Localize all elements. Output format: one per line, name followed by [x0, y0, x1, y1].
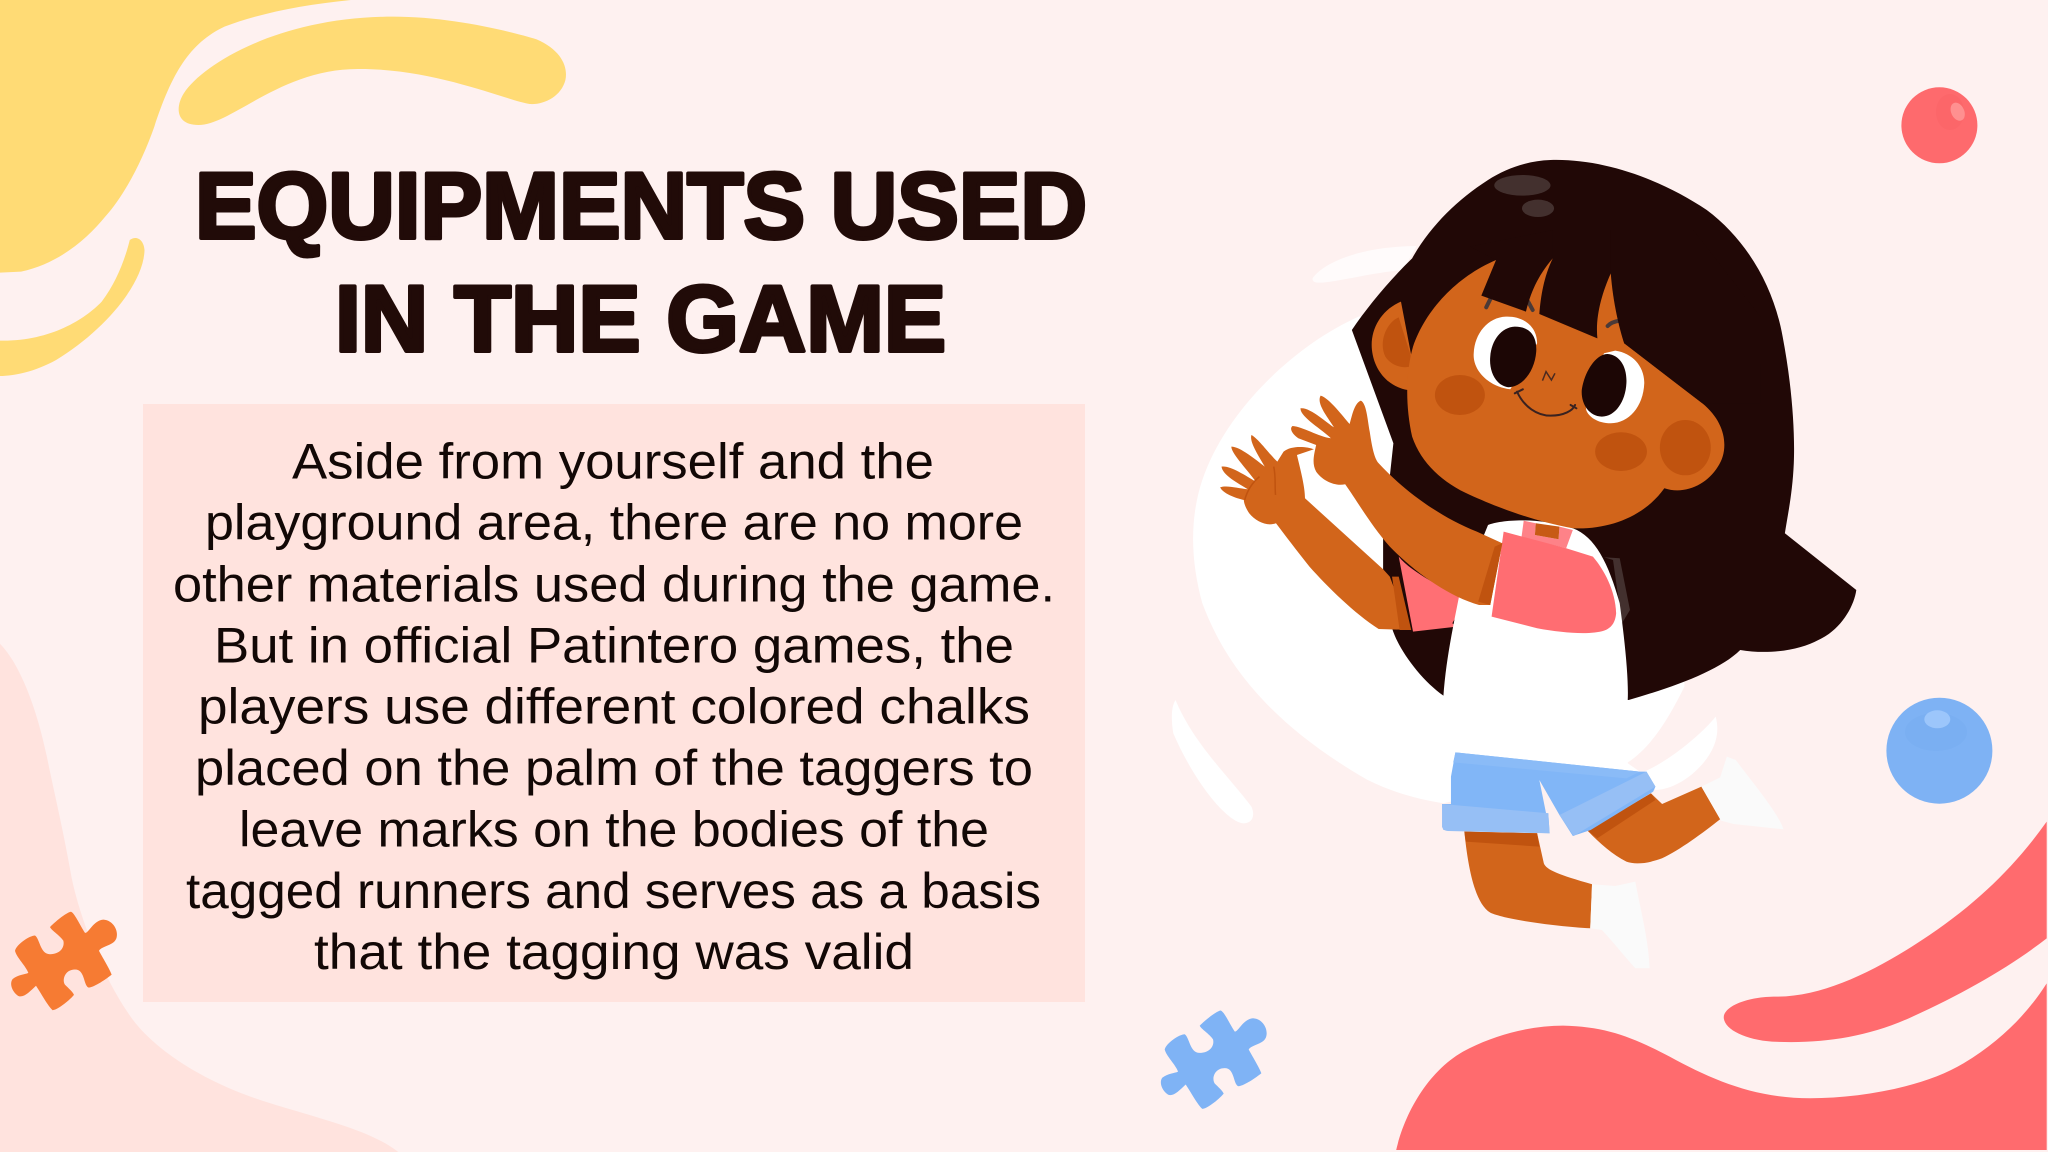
shorts	[1442, 752, 1655, 836]
icon: orange puzzle piece	[11, 912, 117, 1010]
hand fold lines	[1245, 467, 1276, 500]
left shoe	[1590, 882, 1650, 968]
cheeks	[1435, 375, 1711, 475]
body text: placed on the palm of the taggers to	[195, 740, 1033, 796]
decoration: yellow blobs top left	[0, 0, 566, 376]
shorts body	[1442, 752, 1655, 836]
panel: description	[143, 404, 1085, 1002]
right eye	[1582, 351, 1644, 423]
eyebrows	[1486, 298, 1620, 326]
title: EQUIPMENTS USED	[195, 153, 1087, 258]
right leg shadow	[1588, 793, 1655, 838]
decoration: red waves bottom right	[1396, 822, 2047, 1150]
right sleeve	[1492, 532, 1616, 633]
shirt	[1443, 520, 1640, 772]
left leg	[1464, 832, 1592, 928]
hair	[1352, 160, 1856, 700]
collar	[1521, 521, 1573, 548]
right shoe	[1701, 757, 1784, 829]
illustration: girl jumping	[1220, 160, 1856, 968]
waistband	[1453, 752, 1640, 778]
smile	[1515, 389, 1576, 416]
bangs	[1470, 230, 1760, 403]
lower arm shadow	[1392, 577, 1411, 630]
upper arm and hand	[1291, 396, 1502, 605]
lower arm and hand	[1220, 435, 1410, 630]
ear	[1372, 302, 1412, 390]
left eye	[1474, 317, 1537, 389]
decoration: white blob behind girl	[1193, 246, 1684, 803]
decoration: white swoosh top	[1313, 246, 1417, 283]
decoration: white swooshes	[1172, 700, 1717, 823]
face	[1407, 258, 1724, 528]
body text: leave marks on the bodies of the	[239, 802, 989, 858]
upper arm shadow	[1478, 543, 1502, 605]
icon: blue ball	[1886, 698, 1992, 804]
legs and shoes	[1464, 757, 1784, 968]
left sleeve	[1399, 557, 1466, 632]
nose	[1542, 372, 1555, 381]
title	[195, 153, 1087, 371]
right leg	[1588, 787, 1720, 863]
body text: that the tagging was valid	[314, 924, 914, 980]
neck	[1535, 523, 1559, 539]
upper body and head	[1220, 160, 1856, 772]
body text: players use different colored chalks	[198, 678, 1030, 734]
body text: tagged runners and serves as a basis	[186, 863, 1041, 919]
body text: other materials used during the game.	[173, 556, 1055, 612]
body text: But in official Patintero games, the	[214, 618, 1014, 674]
body text	[173, 434, 1055, 980]
hair highlights	[1494, 175, 1745, 623]
icon: blue puzzle piece	[1161, 1010, 1267, 1109]
left cuff	[1442, 804, 1550, 833]
title: IN THE GAME	[335, 266, 946, 371]
body text: Aside from yourself and the	[292, 434, 934, 490]
icon: red ball	[1901, 87, 1977, 163]
decoration: pink blob bottom left	[0, 644, 398, 1152]
left leg shadow	[1464, 832, 1539, 847]
body text: playground area, there are no more	[205, 494, 1023, 550]
right cuff	[1559, 772, 1655, 836]
panel background	[143, 404, 1085, 1002]
inner ear	[1383, 317, 1412, 367]
